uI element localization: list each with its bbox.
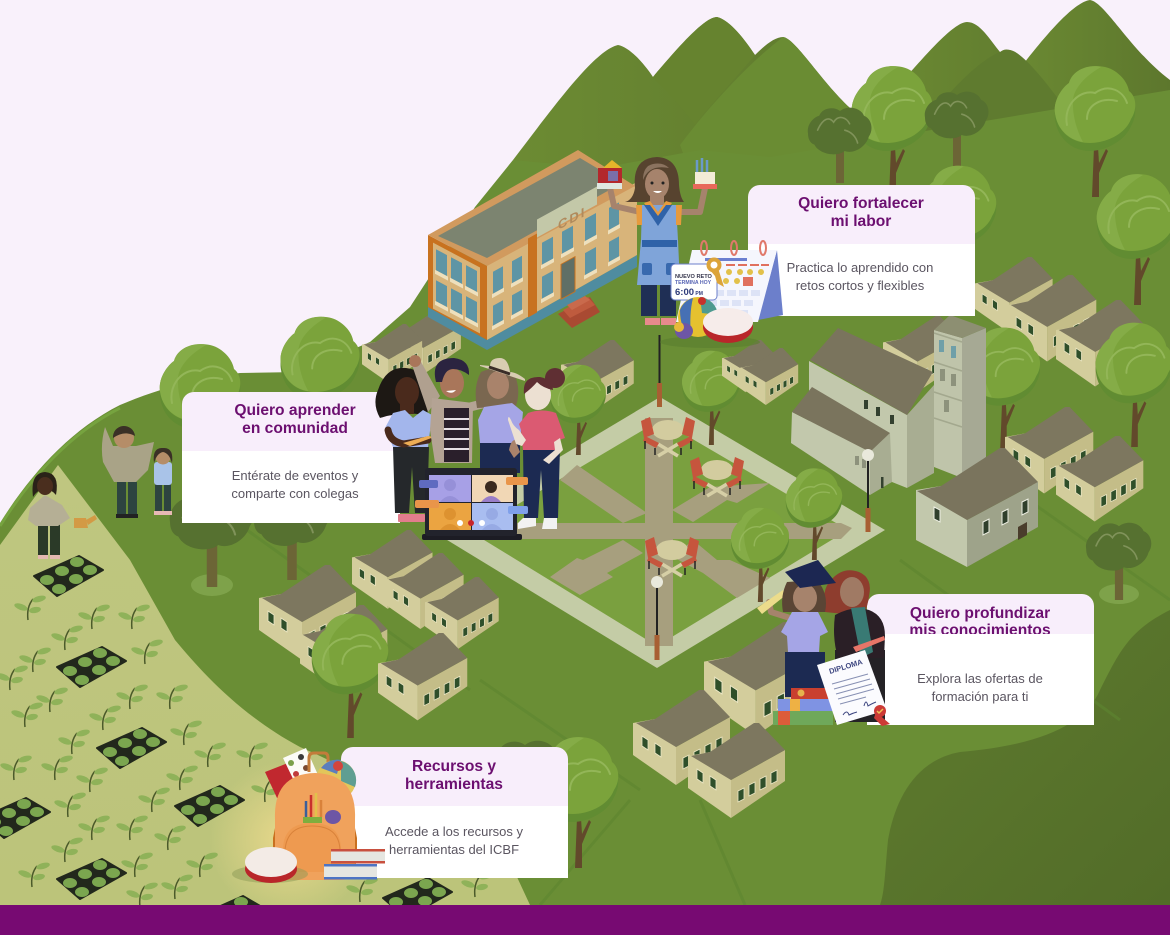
mountains — [513, 0, 1170, 300]
ribbon medal — [706, 258, 724, 287]
teacher figure — [597, 157, 717, 325]
books stack — [773, 688, 833, 725]
top background houses — [722, 257, 1144, 405]
school building: CDI — [558, 203, 586, 233]
lower right houses — [633, 622, 820, 818]
woman pink shirt — [508, 368, 565, 529]
lower left houses — [259, 530, 499, 738]
right hand item: pencil box — [693, 158, 717, 189]
card: profundizar: mis conocimientos — [909, 622, 1051, 639]
school building — [428, 150, 637, 350]
small houses top left — [362, 308, 634, 411]
woman with hat — [476, 358, 525, 473]
diploma — [817, 650, 890, 726]
left hand item: red box — [597, 160, 622, 189]
card: recursos: Accede a los recursos y — [385, 824, 523, 839]
farm field — [0, 465, 530, 920]
gardener — [28, 472, 97, 559]
card: comunidad: Entérate de eventos y — [232, 468, 359, 483]
man with cardigan — [409, 355, 490, 463]
notice badge: nuevo reto: NUEVO RETO — [675, 274, 713, 280]
student — [757, 560, 836, 697]
notice badge: nuevo reto: 6:00 PM — [675, 287, 703, 298]
graduates group — [757, 560, 890, 726]
crop plots — [0, 556, 452, 935]
red notebook — [265, 763, 300, 798]
lamp posts — [651, 335, 874, 660]
watering can — [74, 515, 97, 528]
teacher red hair — [824, 570, 885, 722]
mountain trees — [808, 66, 1170, 448]
faint road lines — [240, 480, 1170, 905]
card: comunidad: en comunidad — [242, 420, 348, 437]
tables with chairs — [641, 417, 744, 576]
diploma: DIPLOMA — [828, 657, 864, 676]
community group — [375, 355, 565, 540]
right houses — [916, 407, 1151, 604]
backpack body — [273, 773, 357, 880]
tambourine — [232, 847, 308, 883]
school steps — [558, 296, 600, 328]
trees behind recursos card — [485, 737, 618, 868]
left trees — [160, 317, 740, 596]
toys: ball, maracas, tambourine — [660, 297, 760, 348]
card: recursos: herramientas — [405, 776, 503, 793]
left people: man and girl — [102, 426, 172, 518]
ball — [316, 760, 356, 800]
card: profundizar: Quiero profundizar — [910, 605, 1050, 622]
bottom bar — [0, 905, 1170, 935]
dark foreground hill — [880, 610, 1170, 905]
card: profundizar — [867, 594, 1094, 725]
card: fortalecer: mi labor — [831, 213, 891, 230]
card: fortalecer: Quiero fortalecer — [798, 195, 924, 212]
notice badge: nuevo reto — [671, 264, 717, 300]
card: recursos: herramientas del ICBF — [389, 842, 519, 857]
card: fortalecer: retos cortos y flexibles — [796, 278, 925, 293]
seedlings — [0, 594, 494, 907]
plaza trees — [731, 468, 842, 602]
card: comunidad: Quiero aprender — [234, 402, 356, 419]
card: recursos: Recursos y — [412, 758, 496, 775]
central church building — [791, 315, 986, 495]
card: fortalecer — [748, 185, 975, 316]
woman with notebook — [375, 368, 434, 522]
card: comunidad: comparte con colegas — [231, 486, 359, 501]
notice badge: nuevo reto: TERMINA HOY — [675, 280, 712, 286]
laptop — [415, 468, 528, 540]
backpack group — [232, 748, 385, 883]
card: profundizar: formación para ti — [932, 689, 1029, 704]
card: comunidad — [182, 392, 400, 523]
card: recursos — [341, 747, 568, 878]
red seal — [874, 705, 890, 726]
card: profundizar: Explora las ofertas de — [917, 671, 1043, 686]
paint palette — [283, 748, 318, 785]
hill edge highlight — [0, 408, 120, 526]
card: fortalecer: Practica lo aprendido con — [787, 260, 933, 275]
calendar — [671, 241, 783, 322]
central plaza — [434, 397, 885, 668]
books — [324, 849, 385, 880]
